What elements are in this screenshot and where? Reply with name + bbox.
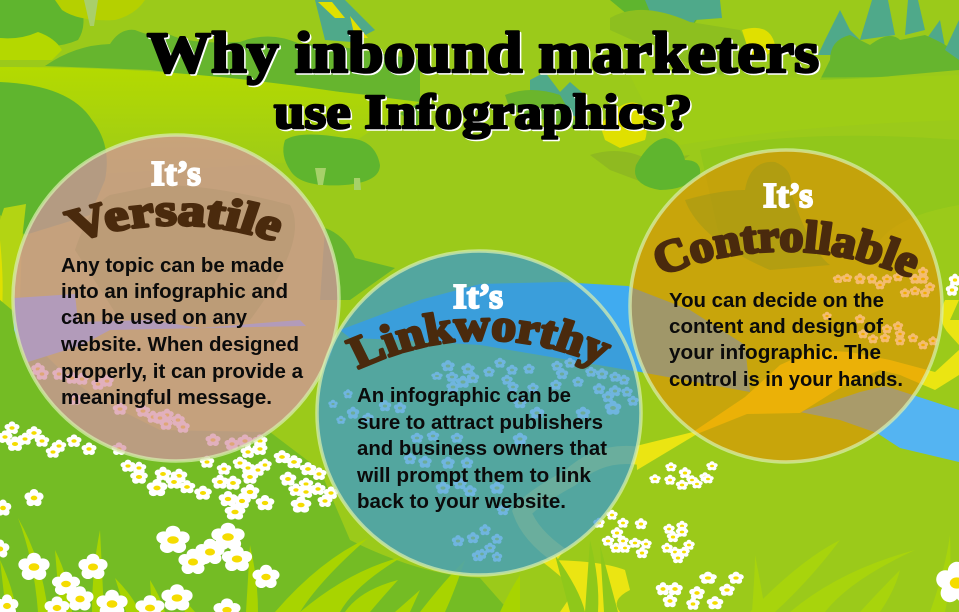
panel: It's Controllable (628, 148, 944, 464)
description: content and design of (669, 315, 883, 338)
river (14, 282, 959, 462)
description: properly, it can provide a (61, 360, 304, 383)
description: will prompt them to link (356, 464, 592, 487)
description: back to your website. (357, 490, 566, 513)
description: website. When designed (60, 333, 299, 356)
description: meaningful message. (61, 386, 272, 409)
flowers under circle 2 (328, 358, 639, 562)
curved heading: Linkworthy: Linkworthy (344, 312, 612, 370)
description: You can decide on the (669, 289, 884, 312)
description (356, 384, 607, 513)
It's label: It’s (151, 154, 201, 193)
main title: Why inbound marketers (148, 22, 820, 86)
description: control is in your hands. (669, 368, 903, 391)
hill shadows inside circle 1 (75, 185, 295, 320)
description: sure to attract publishers (357, 411, 603, 434)
description: Any topic can be made (61, 254, 284, 277)
description: and business owners that (357, 437, 607, 460)
curved heading: Versatile: Versatile (62, 198, 282, 241)
left hill and tree (0, 82, 107, 406)
grass blades (0, 518, 950, 612)
It's label: It’s (763, 176, 813, 215)
description (669, 289, 903, 391)
curved heading: Controllable: Controllable (654, 219, 918, 278)
flowers under circle 3 (822, 267, 938, 349)
main title: Why inbound marketers (147, 20, 819, 85)
main title (147, 20, 820, 140)
lower meadow (0, 300, 510, 612)
panel: It's Versatile (11, 133, 341, 463)
main title: use Infographics? (274, 84, 692, 139)
description (60, 254, 304, 409)
description: your infographic. The (669, 341, 881, 364)
It's label: It’s (453, 277, 503, 316)
yellow stream (522, 300, 959, 612)
main title: use Infographics? (276, 86, 694, 140)
panel: It's Linkworthy (315, 249, 643, 577)
description: can be used on any (61, 306, 248, 329)
hill shadow inside circle 3 (685, 162, 830, 270)
description: into an infographic and (61, 280, 288, 303)
description: An infographic can be (357, 384, 571, 407)
white flowers scattered on the meadow (0, 267, 959, 612)
flowers under circle 1 (31, 363, 190, 433)
far trees and bushes (0, 0, 959, 240)
